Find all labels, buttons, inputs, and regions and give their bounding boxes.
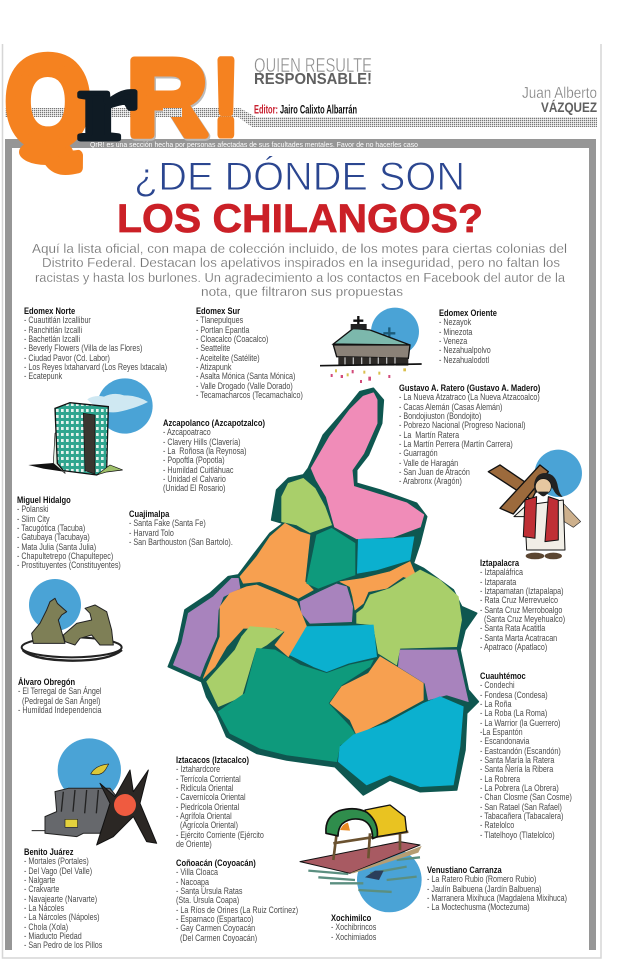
region: Cuajimalpa xyxy=(173,578,240,677)
region: Iztapalapa xyxy=(357,570,462,665)
map of Mexico City boroughs xyxy=(168,388,478,795)
text: Edomex Sur: Edomex Sur - Tlanepulques - Portlan Epantla - Cloacalco (Coacalco) - Seattelite - Aceitelite (Satélite) - Atizapunk - Asalta Mónica (Santa Mónica) - Valle Drogado (Valle Dorado) - Tecamacharcos (Tecamachalco) xyxy=(196,306,303,400)
text: Cuajimalpa: Cuajimalpa - Santa Fake (Santa Fe) - Harvard Tolo - San Barthouston (San Bartolo). xyxy=(129,509,233,547)
region: Alvaro Obregon xyxy=(203,585,307,678)
author name: Juan Alberto xyxy=(522,85,597,102)
author name xyxy=(522,85,597,115)
text: Xochimilco: Xochimilco - Xochibrincos - Xochimiados xyxy=(331,913,376,942)
region: Magdalena Contreras xyxy=(207,627,283,707)
logo: QrR! xyxy=(6,33,239,172)
logo: QrR!: R xyxy=(127,36,207,158)
logo: QrR!: r xyxy=(77,50,137,161)
intro text: racistas y hasta los burlones. Un agradecimiento a los contactos en Facebook del autor de la xyxy=(35,270,566,285)
region: Tlalpan xyxy=(218,648,373,762)
title xyxy=(117,154,483,241)
text: Alvaro Obregon: Álvaro Obregón - El Terregal de San Ángel (Pedregal de San Ángel) - Humildad Independencia xyxy=(18,677,102,715)
intro text: nota, que filtraron sus propuestas xyxy=(201,284,404,299)
text: Gustavo A. Ratero: Gustavo A. Ratero (Gustavo A. Madero) - La Nueva Atzatraco (La Nueva Atzacoalco) - Cacas Alemán (Casas Alemán) - Bondojiuston (Bondojito) - Pobrezo Nacional (Progreso Nacional) - La Martín Ratera - La Martín Perrera (Martín Carrera) - Guarragón - Valle de Haragán - San Juan de Atracón - Arabronx (Aragón) xyxy=(399,383,540,486)
editor credit: Editor: Jairo Calixto Albarrán xyxy=(254,102,357,116)
icon: Xochimilco trajinera xyxy=(300,805,422,912)
region: Tlahuac xyxy=(398,650,468,702)
logo: QrR!: ! xyxy=(213,36,239,158)
section disclaimer: QrR! es una sección hecha por personas afectadas de sus facultades mentales. Favor de no hacerles caso xyxy=(90,142,418,149)
title: LOS CHILANGOS? xyxy=(117,197,483,241)
map outline xyxy=(168,388,478,795)
intro text xyxy=(32,241,567,299)
logo: QrR!: Q xyxy=(6,33,90,172)
text: Venustiano Carranza: Venustiano Carranza - La Ratero Rubio (Romero Rubio) - Jaulín Balbuena (Jardín Balbuena) - Marranera Mixihuca (Magdalena Mixihuca) - La Moctechusma (Moctezuma) xyxy=(427,865,567,912)
intro text: Aquí la lista oficial, con mapa de colección incluido, de los motes para ciertas colonias del xyxy=(32,241,567,256)
text: Iztacacos: Iztacacos (Iztacalco) - Iztahardcore - Terrícola Corriental - Ridícula Oriental - Cavernícola Oriental - Piedrícola Oriental - Agrífola Oriental (Agrícola Oriental) - Ejército Corriente (Ejército de Oriente) xyxy=(176,755,264,849)
intro text: Distrito Federal. Destacan los apelativos inspirados en la inseguridad, pero no faltan los xyxy=(42,255,561,270)
region: Gustavo A. Madero xyxy=(312,393,423,538)
text: Iztapalacra: Iztapalacra - Iztapaláfrica - Iztaparata - Iztapamatan (Iztapalapa) - Rata Cruz Merrevuelco - Santa Cruz Merroboalgo (Santa Cruz Meyehualco) - Santa Rata Acatitla - Santa Marta Acatracan - Apatraco (Apatlaco) xyxy=(480,558,565,652)
icon: Coyotes fountain xyxy=(22,579,122,661)
title: ¿DE DÓNDE SON xyxy=(134,154,465,199)
logo: QrR!: R xyxy=(128,38,208,159)
text: Edomex Norte: Edomex Norte - Cuautitlán Izcallibur - Ranchitlán Izcalli - Bachetlán Izcalli - Beverly Flowers (Villa de las Flores) - Ciudad Pavor (Cd. Labor) - Los Reyes Ixtaharvard (Los Reyes Ixtacala) - Ecatepunk xyxy=(24,306,167,381)
region: Benito Juarez xyxy=(300,584,353,623)
region: Miguel Hidalgo xyxy=(240,523,313,598)
text: Miguel Hidalgo: Miguel Hidalgo - Polanski - Slim City - Tacugótica (Tacuba) - Gatubaya (Tacubaya) - Mata Julia (Santa Julia) - Chapultetrepo (Chapultepec) - Prostituyentes (Constituyentes) xyxy=(17,495,121,570)
text: Edomex Oriente: Edomex Oriente - Nezayok - Minezota - Veneza - Nezahualpolvo - Nezahualodotl xyxy=(439,308,497,365)
icon: Torres de Satelite xyxy=(28,378,153,475)
heading: Quien resulte responsable: RESPONSABLE! xyxy=(254,71,372,88)
heading: Quien resulte responsable: QUIEN RESULTE xyxy=(254,55,372,77)
text: Azcapolanco: Azcapolanco (Azcapotzalco) - Azcapoatraco - Clavery Hills (Clavería) - La Roñosa (la Reynosa) - Popoftla (Popotla) - Humildad Cuitláhuac - Unidad el Calvario (Unidad El Rosario) xyxy=(163,418,265,493)
text: Cuauhtemoc: Cuauhtémoc - Condechi - Fondesa (Condesa) - La Roña - La Roba (La Roma) - La Warrior (la Guerrero) -La Espantón - Escandonavia - Eastcandón (Escandón) - Santa María la Ratera - Santa Ñería la Ribera - La Robrera - La Pobrera (La Obrera) - Chan Closme (San Cosme) - San Ratael (San Rafael) - Tabacañera (Tabacalera) - Ratelolco - Tlatelhoyo (Tlatelolco) xyxy=(480,671,572,840)
author name: VÁZQUEZ xyxy=(541,99,597,115)
icon: Benito Juarez monument xyxy=(32,738,157,845)
region: Venustiano Carranza xyxy=(357,537,414,573)
icon: Jesus carrying cross xyxy=(488,450,582,559)
heading: Quien resulte responsable xyxy=(254,55,372,88)
halftone strip xyxy=(5,108,597,127)
region: Iztacalco xyxy=(340,562,418,610)
region: Cuauhtemoc xyxy=(307,528,355,588)
region: Coyoacan xyxy=(290,625,377,672)
region: Xochimilco xyxy=(330,657,423,735)
region: Milpa Alta xyxy=(338,697,463,787)
icon: Basilica de Guadalupe xyxy=(320,308,422,383)
text: Conoacan: Coñoacán (Coyoacán) - Villa Cloaca - Nacoapa - Santa Úrsula Ratas (Sta. Úrsula Coapa) - La Ríos de Orines (La Ruiz Cortínez) - Esparnaco (Espartaco) - Gay Carmen Coyoacán (Del Carmen Coyoacán) xyxy=(176,858,298,943)
region: Azcapotzalco xyxy=(282,478,332,533)
text: Benito Juarez: Benito Juárez - Mortales (Portales) - Del Vago (Del Valle) - Nalgarte - Crakvarte - Navajearte (Narvarte) - La Nácoles - La Nárcoles (Nápoles) - Chola (Xola) - Miaducto Piedad - San Pedro de los Pillos xyxy=(24,847,102,950)
